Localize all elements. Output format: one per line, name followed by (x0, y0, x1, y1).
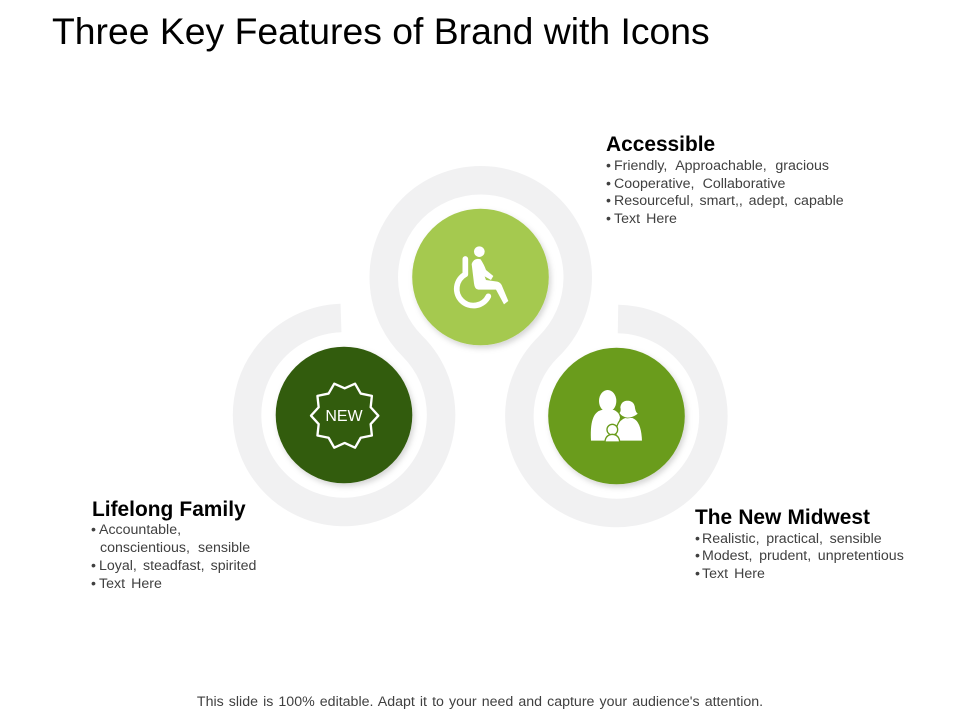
circle: lifelong family: NEW (325, 408, 364, 425)
icon: wheelchair user (457, 246, 508, 306)
text block: accessible: Friendly, Approachable, gracious (614, 158, 829, 174)
text block: lifelong family: Loyal, steadfast, spirited (99, 558, 256, 574)
text block: lifelong family: Accountable, (99, 522, 181, 538)
footer note: This slide is 100% editable. Adapt it to your need and capture your audience's attention. (197, 694, 763, 710)
text block: accessible (606, 133, 844, 227)
text block: lifelong family: Text Here (99, 576, 162, 592)
text block: accessible: Text Here (614, 211, 677, 227)
icon: new badge (311, 384, 378, 448)
title: Three Key Features of Brand with Icons (52, 10, 710, 52)
text block: accessible: • (606, 158, 611, 174)
heading: lifelong family: Lifelong Family (92, 498, 246, 521)
text block: lifelong family: conscientious, sensible (100, 540, 250, 556)
ribbon: grey S-curved ring (247, 180, 713, 513)
text block: the new midwest: • (695, 548, 700, 564)
text block: the new midwest: • (695, 531, 700, 547)
text block: lifelong family: • (91, 522, 96, 538)
text block: the new midwest: Modest, prudent, unpretentious (702, 548, 904, 564)
text block: accessible: • (606, 193, 611, 209)
text block: the new midwest (695, 506, 904, 582)
text block: the new midwest: Realistic, practical, sensible (702, 531, 882, 547)
circle: the new midwest (548, 348, 685, 484)
circle: lifelong family (276, 347, 412, 483)
text block: the new midwest: Text Here (702, 566, 765, 582)
circle: accessible (412, 209, 549, 345)
text block: accessible: Resourceful, smart,, adept, capable (614, 193, 844, 209)
text block: accessible: • (606, 176, 611, 192)
text block: accessible: • (606, 211, 611, 227)
heading: accessible: Accessible (606, 133, 715, 156)
text block: lifelong family: • (91, 558, 96, 574)
text block: the new midwest: • (695, 566, 700, 582)
icon: family (591, 390, 643, 442)
text block: accessible: Cooperative, Collaborative (614, 176, 785, 192)
heading: the new midwest: The New Midwest (695, 506, 870, 529)
text block: lifelong family (91, 498, 256, 592)
text block: lifelong family: • (91, 576, 96, 592)
